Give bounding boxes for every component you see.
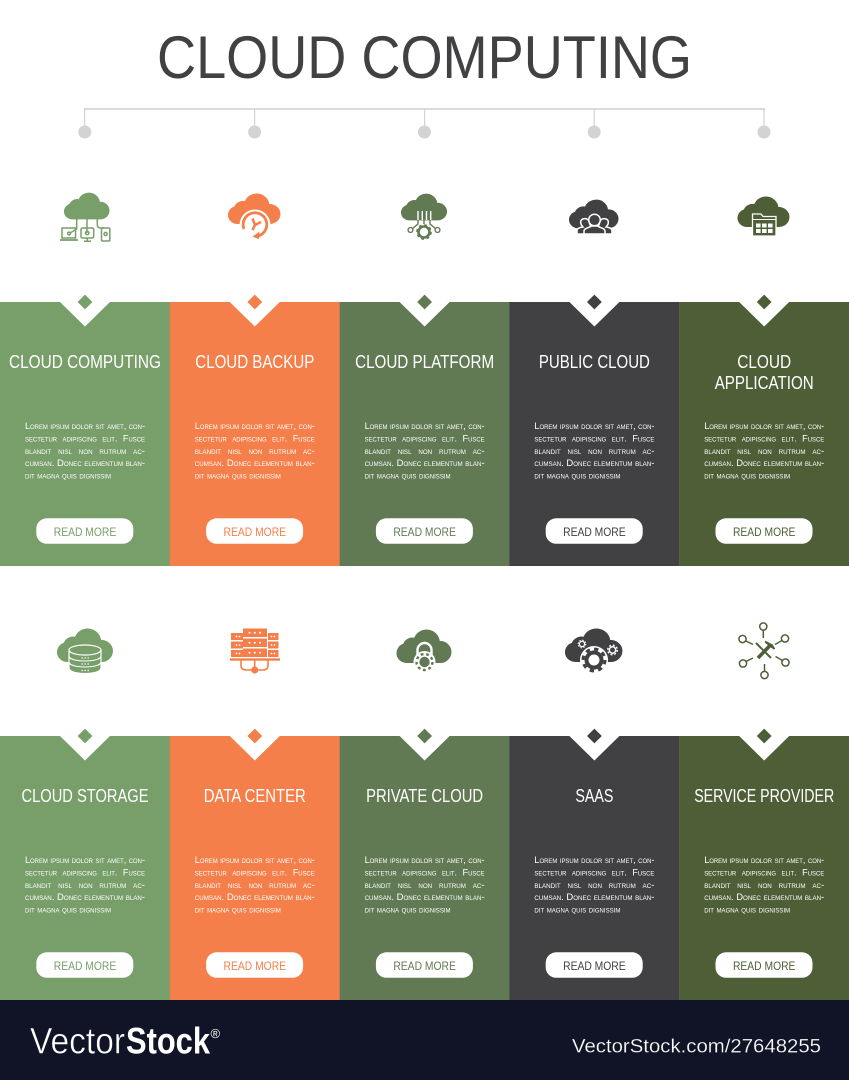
- panel: cloud platform: dit magna quis dignissim: [365, 470, 451, 480]
- panel: service provider: dit magna quis dignissim: [704, 904, 790, 914]
- panel: cloud platform: sectetur adipiscing elit. Fusce: [365, 434, 485, 444]
- panel: cloud backup: READ MORE: [224, 525, 286, 539]
- footer watermark bar: ®: [210, 1026, 220, 1041]
- panel: cloud platform: Lorem ipsum dolor sit amet, con-: [365, 421, 485, 431]
- icon: public cloud people: [569, 200, 619, 234]
- icon: cloud storage database: [57, 629, 113, 674]
- panel: data center: blandit nisl non rutrum ac-: [195, 880, 315, 890]
- panel: cloud application: Lorem ipsum dolor sit amet, con-: [704, 421, 824, 431]
- panel: service provider: Lorem ipsum dolor sit amet, con-: [704, 855, 824, 865]
- panel: cloud backup: CLOUD BACKUP: [195, 352, 314, 372]
- panel: cloud computing: Lorem ipsum dolor sit amet, con-: [25, 421, 145, 431]
- panel: private cloud: dit magna quis dignissim: [365, 904, 451, 914]
- panel: cloud computing: cumsan. Donec elementum blan-: [25, 458, 145, 468]
- footer watermark bar: Stock: [126, 1020, 210, 1062]
- panel: private cloud: Lorem ipsum dolor sit amet, con-: [365, 855, 485, 865]
- panel: private cloud: sectetur adipiscing elit. Fusce: [365, 868, 485, 878]
- icon: data center servers: [230, 628, 280, 674]
- panel: service provider: READ MORE: [733, 959, 795, 973]
- panel: cloud storage: blandit nisl non rutrum ac-: [25, 880, 145, 890]
- panel: public cloud: dit magna quis dignissim: [534, 470, 620, 480]
- panel: data center: cumsan. Donec elementum blan-: [195, 892, 315, 902]
- panel: cloud computing: sectetur adipiscing elit. Fusce: [25, 434, 145, 444]
- panel: cloud storage: Lorem ipsum dolor sit amet, con-: [25, 855, 145, 865]
- connector timeline: [78, 108, 771, 138]
- panel: cloud computing: [0, 295, 170, 566]
- panel: private cloud: cumsan. Donec elementum blan-: [365, 892, 485, 902]
- panel: public cloud: READ MORE: [563, 525, 626, 539]
- panel: saas: [509, 729, 679, 1000]
- panel: cloud backup: Lorem ipsum dolor sit amet, con-: [195, 421, 315, 431]
- panel: saas: dit magna quis dignissim: [534, 904, 620, 914]
- panel: cloud computing: blandit nisl non rutrum ac-: [25, 446, 145, 456]
- panel: cloud storage: CLOUD STORAGE: [22, 786, 148, 806]
- panel: cloud storage: READ MORE: [54, 959, 116, 973]
- panel: cloud application: CLOUD: [737, 352, 791, 372]
- footer watermark bar: Vector: [30, 1020, 125, 1062]
- panel: public cloud: [509, 295, 679, 566]
- icon: cloud application folder: [737, 197, 789, 236]
- panel: cloud computing: READ MORE: [54, 525, 116, 539]
- panel: cloud application: [679, 295, 849, 566]
- panel: cloud storage: cumsan. Donec elementum blan-: [25, 892, 145, 902]
- panel: public cloud: blandit nisl non rutrum ac-: [534, 446, 654, 456]
- panel: cloud storage: [0, 729, 170, 1000]
- panel: saas: READ MORE: [563, 959, 626, 973]
- panel: cloud application: READ MORE: [733, 525, 795, 539]
- panel: cloud platform: READ MORE: [393, 525, 456, 539]
- panel: data center: READ MORE: [224, 959, 286, 973]
- panel: cloud backup: sectetur adipiscing elit. Fusce: [195, 434, 315, 444]
- icon: service provider tools: [739, 623, 789, 679]
- panel: cloud backup: cumsan. Donec elementum blan-: [195, 458, 315, 468]
- panel: public cloud: PUBLIC CLOUD: [539, 352, 650, 372]
- panel: cloud application: dit magna quis dignissim: [704, 470, 790, 480]
- panel: data center: DATA CENTER: [204, 786, 306, 806]
- panel: saas: sectetur adipiscing elit. Fusce: [534, 868, 654, 878]
- panel: service provider: cumsan. Donec elementum blan-: [704, 892, 824, 902]
- panel: public cloud: Lorem ipsum dolor sit amet, con-: [534, 421, 654, 431]
- panel: cloud storage: dit magna quis dignissim: [25, 904, 111, 914]
- panel: service provider: blandit nisl non rutrum ac-: [704, 880, 824, 890]
- panel: private cloud: PRIVATE CLOUD: [366, 786, 483, 806]
- icon: cloud platform: [401, 194, 447, 239]
- footer watermark bar: [0, 1000, 849, 1080]
- panel: private cloud: blandit nisl non rutrum ac-: [365, 880, 485, 890]
- panel: data center: Lorem ipsum dolor sit amet, con-: [195, 855, 315, 865]
- panel: cloud platform: [340, 295, 510, 566]
- panel: saas: cumsan. Donec elementum blan-: [534, 892, 654, 902]
- footer watermark bar: VectorStock.com/27648255: [572, 1036, 821, 1058]
- icon: private cloud lock: [396, 630, 451, 673]
- panel: private cloud: READ MORE: [393, 959, 456, 973]
- panel: service provider: sectetur adipiscing elit. Fusce: [704, 868, 824, 878]
- panel: data center: [170, 729, 340, 1000]
- panel: cloud platform: blandit nisl non rutrum ac-: [365, 446, 485, 456]
- panel: cloud application: sectetur adipiscing elit. Fusce: [704, 434, 824, 444]
- icon: cloud computing devices: [60, 193, 110, 241]
- panel: public cloud: sectetur adipiscing elit. Fusce: [534, 434, 654, 444]
- panel: saas: blandit nisl non rutrum ac-: [534, 880, 654, 890]
- panel: service provider: [679, 729, 849, 1000]
- panel: cloud backup: [170, 295, 340, 566]
- panel: cloud application: blandit nisl non rutrum ac-: [704, 446, 824, 456]
- panel: data center: sectetur adipiscing elit. Fusce: [195, 868, 315, 878]
- panel: saas: Lorem ipsum dolor sit amet, con-: [534, 855, 654, 865]
- panel: public cloud: cumsan. Donec elementum blan-: [534, 458, 654, 468]
- panel: cloud platform: cumsan. Donec elementum blan-: [365, 458, 485, 468]
- panel: cloud backup: dit magna quis dignissim: [195, 470, 281, 480]
- panel: cloud backup: blandit nisl non rutrum ac-: [195, 446, 315, 456]
- panel: cloud computing: dit magna quis dignissim: [25, 470, 111, 480]
- icon: cloud backup clock: [228, 194, 280, 240]
- panel: cloud computing: CLOUD COMPUTING: [9, 352, 161, 372]
- panel: private cloud: [340, 729, 510, 1000]
- panel: data center: dit magna quis dignissim: [195, 904, 281, 914]
- panel: cloud application: cumsan. Donec elementum blan-: [704, 458, 824, 468]
- panel: cloud platform: CLOUD PLATFORM: [355, 352, 494, 372]
- icon: saas gears: [565, 629, 622, 674]
- panel: cloud storage: sectetur adipiscing elit. Fusce: [25, 868, 145, 878]
- panel: saas: SAAS: [575, 786, 613, 806]
- panel: cloud application: APPLICATION: [715, 373, 814, 393]
- title: CLOUD COMPUTING: [157, 24, 692, 91]
